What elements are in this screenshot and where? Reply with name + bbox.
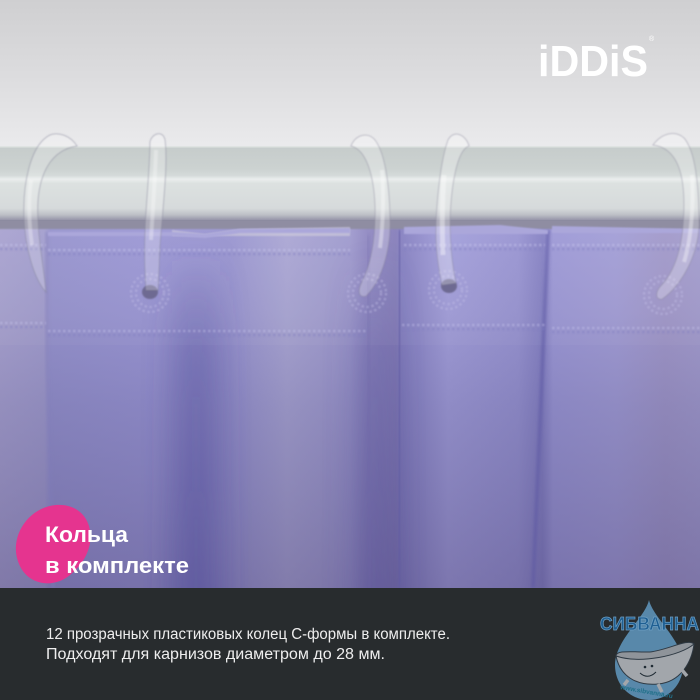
brand name: СИБВАННА [600, 614, 699, 634]
website: www.sibvanna.ru [619, 684, 673, 700]
brand logo: IDDIS: iDDiS [538, 37, 648, 86]
icon: bathtub [616, 642, 694, 692]
ring 1 [24, 134, 77, 292]
ring 4 [436, 134, 469, 285]
watermark logo: Sibvanna [600, 600, 699, 700]
ring 3 [351, 135, 390, 296]
curtain rod [0, 146, 700, 236]
curtain [0, 222, 700, 650]
heading [45, 522, 189, 578]
pink blob behind heading [16, 505, 90, 583]
ring 5 [653, 134, 699, 299]
wall background [0, 0, 700, 150]
ring 2 [145, 134, 166, 290]
description text: 12 прозрачных пластиковых колец С-формы в комплекте. [46, 626, 450, 643]
bottom dark panel [0, 588, 700, 700]
eyelet holes [142, 279, 457, 299]
curtain panel top edges [48, 225, 700, 238]
curtain hem stitch dots [0, 245, 700, 335]
brand logo: IDDIS: ® [649, 35, 655, 43]
heading: в комплекте [45, 553, 189, 578]
description text: Подходят для карнизов диаметром до 28 мм. [46, 646, 385, 663]
curtain rings [24, 134, 699, 299]
eyelet stitch dots [131, 271, 682, 314]
icon: water drop [615, 600, 683, 700]
heading: Кольца [45, 522, 128, 547]
description text [46, 626, 450, 663]
